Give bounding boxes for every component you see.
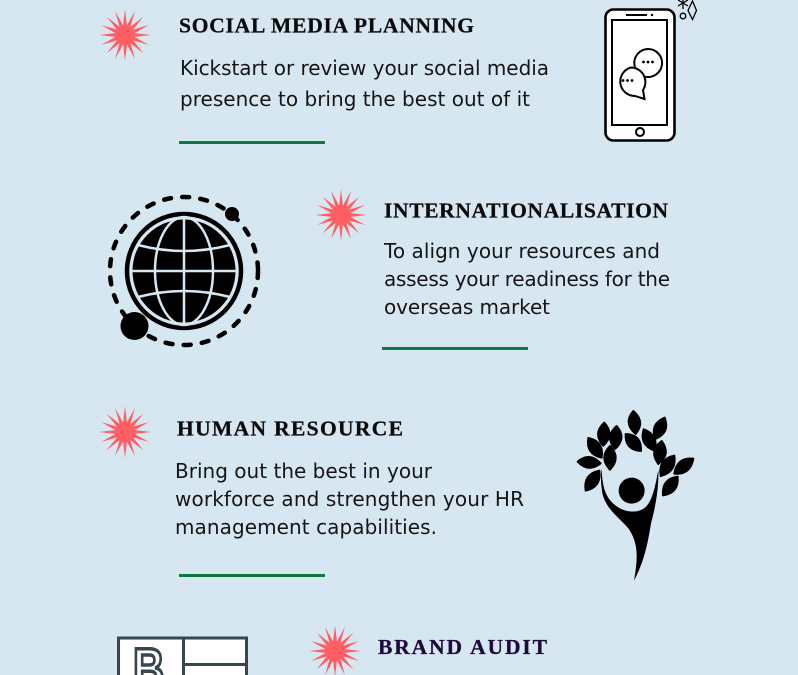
icon: globe with orbit (110, 197, 258, 345)
icon: person tree (578, 411, 693, 581)
text block: human resource description: management capabilities. (175, 515, 437, 539)
text block: internationalisation description: To align your resources and (383, 239, 660, 263)
heading: internationalisation: INTERNATIONALISATION (384, 198, 668, 222)
text block: human resource description: workforce and strengthen your HR (175, 487, 524, 511)
text block: internationalisation description: assess your readiness for the (384, 267, 670, 291)
text block: internationalisation description: overseas market (384, 295, 550, 319)
icon: red starburst (99, 406, 151, 458)
panel: social media planning (99, 0, 696, 144)
text block: internationalisation description (383, 239, 670, 319)
text block: social media planning description (180, 56, 549, 111)
text block: social media planning description: presence to bring the best out of it (180, 87, 530, 111)
heading: human resource: HUMAN RESOURCE (177, 416, 403, 440)
icon: red starburst (99, 9, 151, 61)
panel: internationalisation (110, 189, 670, 350)
icon: red starburst (309, 625, 361, 675)
text block: human resource description: Bring out the best in your (175, 459, 433, 483)
heading: brand audit: BRAND AUDIT (378, 635, 548, 659)
panel: brand audit (118, 625, 548, 675)
icon: red starburst (315, 189, 367, 241)
text block: human resource description (175, 459, 524, 539)
text block: social media planning description: Kickstart or review your social media (180, 56, 549, 80)
icon: brand grid card (118, 637, 246, 675)
green underline (382, 347, 528, 350)
green underline (179, 141, 325, 144)
green underline (179, 574, 325, 577)
heading: social media planning: SOCIAL MEDIA PLANNING (179, 14, 474, 38)
panel: human resource (99, 406, 693, 581)
icon: smartphone with chat bubbles (606, 0, 696, 140)
